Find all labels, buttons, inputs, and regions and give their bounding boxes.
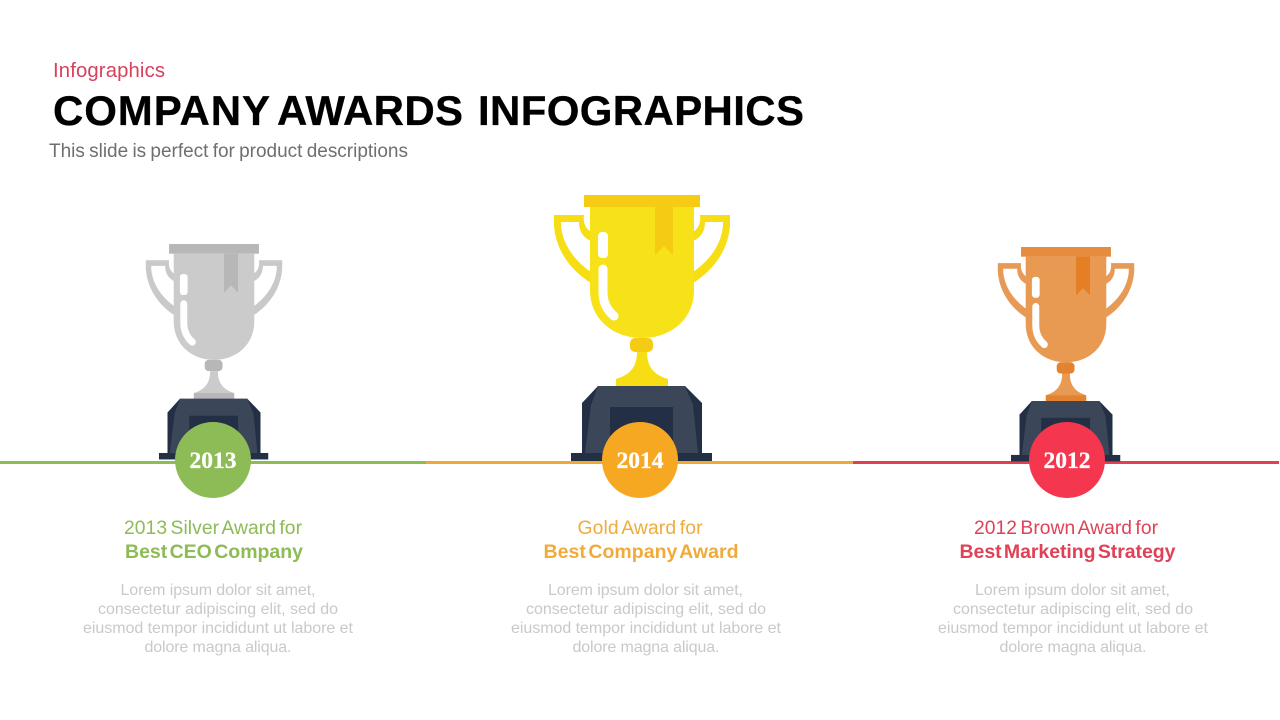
award description: Lorem ipsum dolor sit amet, (975, 582, 1170, 599)
award heading (960, 518, 1176, 563)
title (53, 87, 804, 134)
award description: dolore magna aliqua. (144, 639, 292, 656)
text block: silver award (83, 518, 354, 656)
award heading (544, 518, 738, 563)
award description: consectetur adipiscing elit, sed do (98, 601, 338, 618)
award heading: 2013 Silver Award for (124, 518, 303, 539)
year badge 2014 (602, 422, 678, 498)
award heading: Gold Award for (578, 518, 703, 539)
award heading: Best Marketing Strategy (960, 541, 1176, 563)
text block: gold award (511, 518, 782, 656)
award description: eiusmod tempor incididunt ut labore et (83, 620, 354, 637)
trophy: gold (554, 195, 730, 461)
award description (938, 582, 1209, 656)
title: AWARDS (277, 87, 463, 134)
header (49, 60, 804, 162)
eyebrow label: Infographics (53, 60, 165, 82)
award heading: 2012 Brown Award for (974, 518, 1159, 539)
year badge 2012: 2012 (1044, 448, 1090, 474)
text block: bronze award (938, 518, 1209, 656)
timeline line (0, 461, 1279, 464)
award description (83, 582, 354, 656)
award description: Lorem ipsum dolor sit amet, (548, 582, 743, 599)
title: COMPANY (53, 87, 270, 134)
award description: dolore magna aliqua. (572, 639, 720, 656)
year badge 2013: 2013 (190, 448, 236, 474)
title: INFOGRAPHICS (478, 87, 804, 134)
subtitle: This slide is perfect for product descriptions (49, 141, 408, 162)
award description: eiusmod tempor incididunt ut labore et (511, 620, 782, 637)
award description: Lorem ipsum dolor sit amet, (120, 582, 316, 599)
award heading: Best CEO Company (125, 541, 303, 563)
award heading: Best Company Award (544, 541, 738, 563)
year badge 2014: 2014 (616, 448, 664, 474)
award description (511, 582, 782, 656)
trophy: bronze (998, 247, 1134, 461)
award description: consectetur adipiscing elit, sed do (526, 601, 766, 618)
award heading (124, 518, 303, 563)
award description: dolore magna aliqua. (1000, 639, 1146, 656)
award description: consectetur adipiscing elit, sed do (953, 601, 1193, 618)
award description: eiusmod tempor incididunt ut labore et (938, 620, 1209, 637)
year badge 2012 (1029, 422, 1105, 498)
trophy: silver (146, 244, 282, 459)
year badge 2013 (175, 422, 251, 498)
